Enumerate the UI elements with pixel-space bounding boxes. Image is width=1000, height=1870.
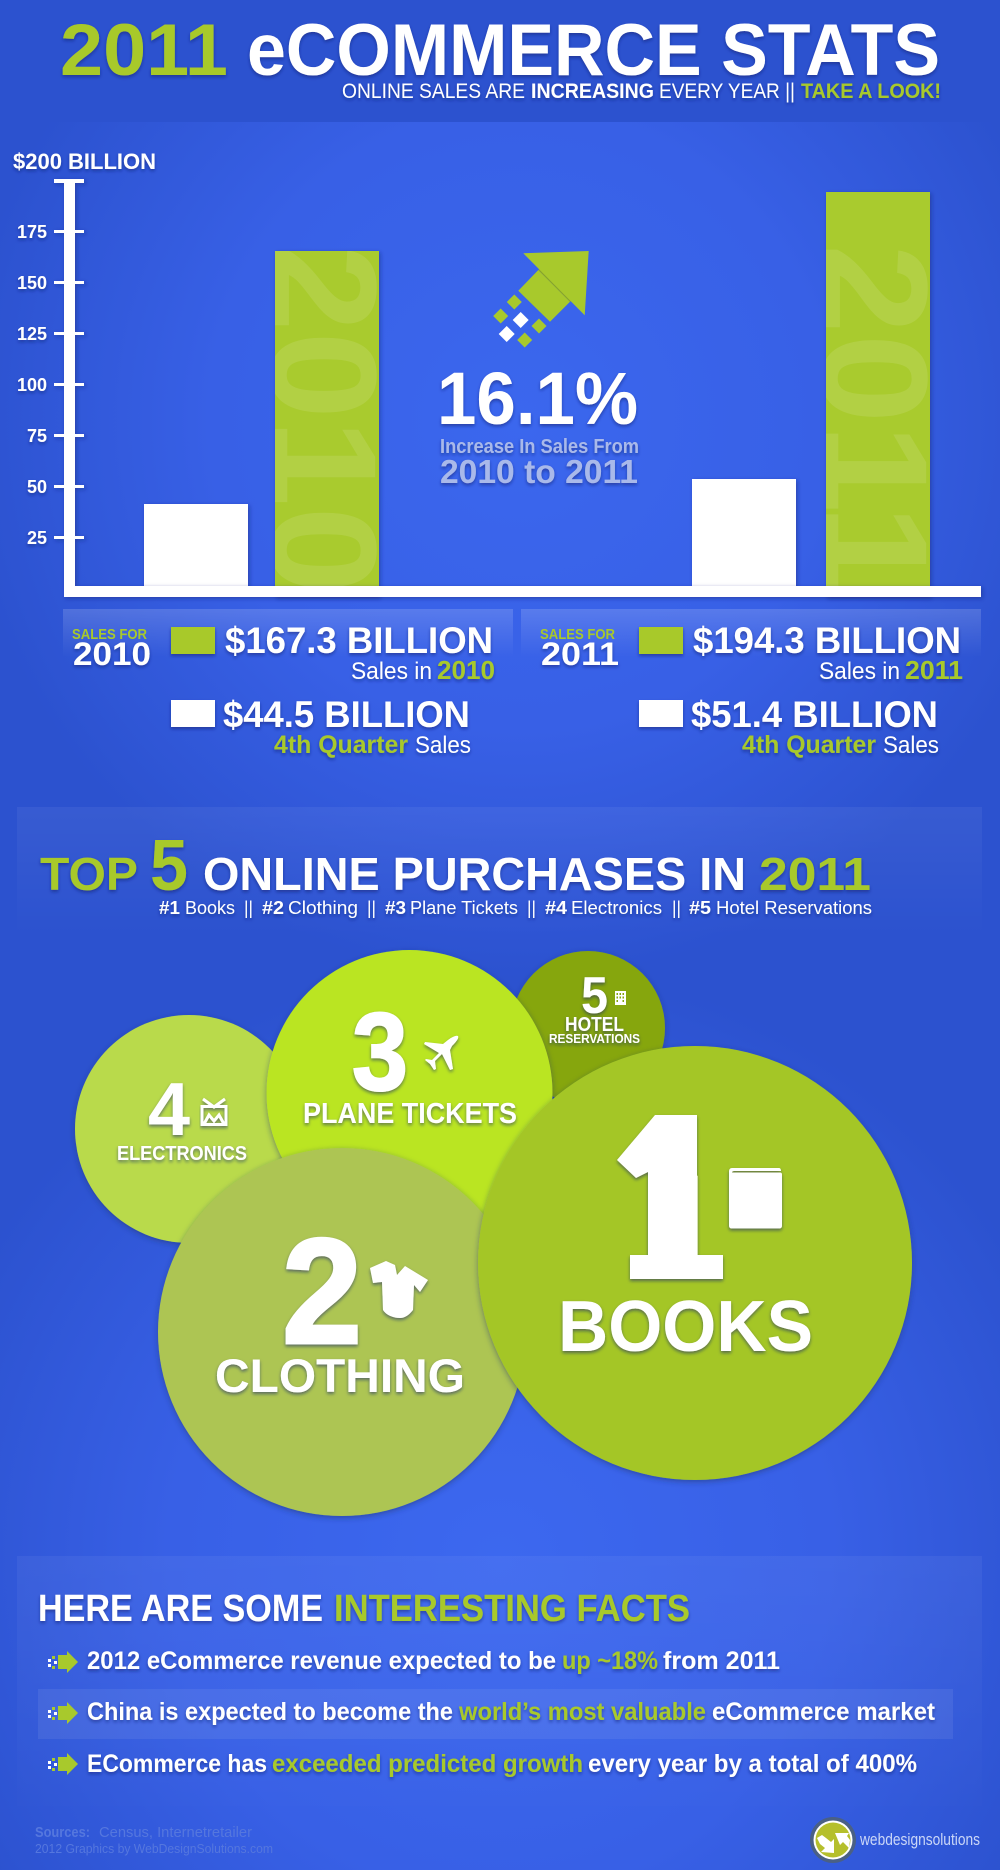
subtitle: TAKE A LOOK! (801, 80, 941, 103)
y axis tick labels: 50 (27, 477, 47, 497)
circle 2: clothing: CLOTHING (215, 1349, 465, 1402)
circle 2: clothing: 2 (282, 1207, 362, 1375)
logo: web design solutions (810, 1817, 980, 1863)
panel: sales for 2011: Sales (883, 732, 939, 759)
panel: sales for 2011 (521, 609, 981, 759)
chart axes (54, 179, 981, 597)
panel: sales for 2011: Sales in (819, 658, 900, 685)
panel: sales for 2010: SALES FOR (72, 626, 147, 643)
heading: interesting facts: INTERESTING FACTS (334, 1588, 690, 1630)
icon: television (202, 1099, 226, 1124)
heading: top 5 online purchases: ONLINE PURCHASES IN (203, 848, 746, 900)
fact 1: from 2011 (663, 1647, 780, 1675)
subtitle: INCREASING (531, 80, 654, 103)
y axis tick labels (17, 222, 47, 548)
callout: 16.1% increase: 16.1% (437, 357, 638, 440)
circle 5: hotel reservations: RESERVATIONS (549, 1031, 640, 1046)
panel: sales for 2011: 2011 (541, 636, 619, 672)
icon: fact arrow 1 (48, 1651, 78, 1673)
top 5 list line: Books (185, 898, 235, 918)
bar: 2010 sales: 2010 (240, 244, 408, 594)
panel: sales for 2010 (63, 609, 513, 759)
icon: book (729, 1168, 782, 1228)
top 5 list line: || (527, 898, 536, 918)
panel: sales for 2010: 2010 (73, 636, 151, 672)
circle 5: hotel reservations: 5 (581, 967, 608, 1025)
panel: sales for 2011: 2011 (905, 655, 963, 685)
sources note: Census, Internetretailer (99, 1824, 252, 1841)
y axis tick labels: 175 (17, 222, 47, 242)
panel: interesting facts (17, 1556, 982, 1806)
panel: sales for 2011: 4th Quarter (742, 731, 876, 759)
heading: top 5 online purchases: TOP (40, 848, 138, 900)
heading: interesting facts: HERE ARE SOME (38, 1588, 323, 1630)
fact 2: China is expected to become the (87, 1698, 453, 1726)
circle 3: plane tickets (266, 950, 552, 1236)
fact row highlight (38, 1689, 953, 1739)
icon: fact arrow 3 (48, 1753, 78, 1775)
circle 3: plane tickets: PLANE TICKETS (303, 1098, 517, 1130)
circle 4: electronics (75, 1015, 303, 1243)
panel: sales for 2011: $51.4 BILLION (691, 694, 938, 735)
callout: 16.1% increase: Increase In Sales From (440, 436, 639, 458)
icon: fact arrow 2 (48, 1702, 78, 1724)
y axis tick labels: 25 (27, 528, 47, 548)
heading: top 5 online purchases (40, 826, 871, 906)
icon: hotel (615, 991, 626, 1005)
panel: sales for 2011: $194.3 BILLION (693, 620, 961, 661)
subtitle: ONLINE SALES ARE (342, 80, 525, 103)
top 5 list line: || (367, 898, 376, 918)
y axis tick labels: 125 (17, 324, 47, 344)
top 5 list line: || (244, 898, 253, 918)
fact 3: every year by a total of 400% (588, 1750, 917, 1778)
fact 2: world’s most valuable (458, 1698, 706, 1726)
icon: shirt (370, 1261, 428, 1318)
fact 3: ECommerce has (87, 1750, 267, 1778)
y axis label: $200 BILLION (13, 149, 156, 174)
top 5 list line (159, 898, 872, 918)
circle 4: electronics: ELECTRONICS (117, 1143, 247, 1165)
fact 2 (87, 1698, 936, 1726)
bar: 2011 fourth quarter (692, 479, 796, 587)
bar: 2010 fourth quarter (144, 504, 248, 587)
subtitle (342, 80, 941, 103)
bar: 2011 sales (826, 192, 934, 600)
fact 1: up ~18% (562, 1647, 658, 1675)
fact 3 (87, 1750, 917, 1778)
icon: plane (424, 1036, 458, 1070)
heading: top 5 online purchases: 2011 (759, 848, 871, 900)
numeral 1 (617, 1115, 725, 1311)
y axis tick labels: 100 (17, 375, 47, 395)
sources note: Sources: (35, 1824, 90, 1841)
subtitle: EVERY YEAR || (659, 80, 795, 103)
title: 2011 (60, 10, 228, 91)
top 5 list line: #2 (262, 898, 284, 918)
top 5 list line: Electronics (571, 898, 662, 918)
panel: sales for 2010: Sales (415, 732, 471, 759)
fact 1: 2012 eCommerce revenue expected to be (87, 1647, 556, 1675)
top 5 list line: Clothing (288, 898, 358, 918)
sources note (35, 1824, 273, 1856)
top 5 list line: || (672, 898, 681, 918)
bar: 2010 sales (274, 250, 382, 600)
circle 3: plane tickets: 3 (352, 991, 408, 1114)
panel: sales for 2011: SALES FOR (540, 626, 615, 643)
panel: sales for 2010: $167.3 BILLION (225, 620, 493, 661)
callout: 16.1% increase: 2010 to 2011 (440, 453, 638, 490)
top 5 list line: #5 (689, 898, 711, 918)
circle 1: books (478, 1046, 912, 1480)
circle 4: electronics: 4 (148, 1067, 190, 1151)
numeral 1: 1 (642, 1143, 725, 1311)
top 5 list line: #3 (385, 898, 406, 918)
sources note: 2012 Graphics by WebDesignSolutions.com (35, 1841, 273, 1856)
circle 5: hotel reservations: HOTEL (565, 1014, 624, 1036)
icon: growth arrow (493, 251, 589, 348)
circle 5: hotel reservations (511, 951, 665, 1105)
callout: 16.1% increase (437, 357, 639, 490)
panel: sales for 2010: 2010 (437, 655, 495, 685)
title: eCOMMERCE STATS (247, 10, 940, 91)
panel: sales for 2010: 4th Quarter (274, 731, 408, 759)
panel: sales for 2010: $44.5 BILLION (223, 694, 470, 735)
circle 2: clothing (158, 1148, 526, 1516)
y axis tick labels: 75 (27, 426, 47, 446)
top 5 list line: #4 (545, 898, 567, 918)
panel: sales for 2010: Sales in (351, 658, 432, 685)
top 5 list line: #1 (159, 898, 180, 918)
heading: interesting facts (38, 1588, 690, 1630)
fact 3: exceeded predicted growth (272, 1750, 583, 1778)
fact 2: eCommerce market (712, 1698, 936, 1726)
top 5 list line: Hotel Reservations (716, 898, 872, 918)
panel: top 5 heading band (17, 807, 982, 937)
circle 1: books: BOOKS (558, 1287, 813, 1367)
heading: top 5 online purchases: 5 (150, 826, 188, 906)
top 5 list line: Plane Tickets (410, 898, 518, 918)
bar: 2011 sales: 2011 (791, 244, 959, 594)
y axis tick labels: 150 (17, 273, 47, 293)
